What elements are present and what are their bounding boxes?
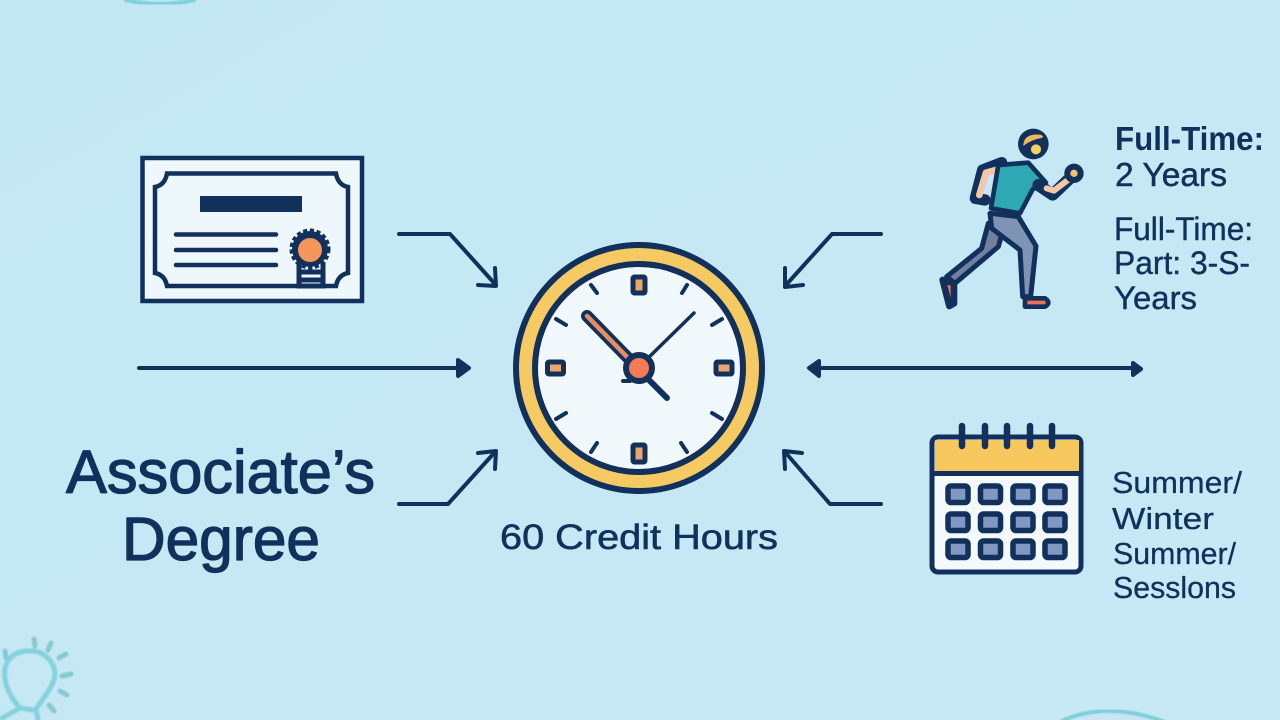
arrow: runner to clock (785, 234, 881, 287)
clock minor ticks (556, 285, 722, 452)
text: part-time duration (1114, 211, 1253, 316)
calendar rings (962, 426, 1052, 446)
seal ribbon (299, 262, 323, 286)
text: part-time duration: Full-Time: (1114, 211, 1253, 247)
icon: clock (516, 245, 762, 491)
text: summer and winter sessions: Summer/ (1113, 536, 1236, 571)
clock hour markers (548, 277, 732, 462)
text: full-time duration (1115, 120, 1264, 193)
seal rosette (292, 231, 328, 267)
title: Associate's Degree: Associate’s (66, 438, 375, 506)
runner legs (947, 213, 1036, 297)
arrow: degree to clock (399, 451, 496, 504)
text: full-time duration: Full-Time: (1115, 120, 1264, 157)
arrow: calendar to clock (784, 451, 881, 504)
icon: running person (943, 129, 1081, 307)
text: part-time duration: Part: 3-S- (1114, 245, 1250, 281)
arrow: double-headed right (809, 361, 1141, 376)
icon: calendar (932, 426, 1081, 572)
calendar header (935, 440, 1079, 472)
text: summer and winter sessions: Winter (1112, 501, 1214, 536)
runner front arm (1038, 167, 1081, 195)
arrow: certificate to clock (399, 234, 496, 286)
runner head (1018, 129, 1049, 159)
text: summer and winter sessions (1112, 465, 1242, 605)
decoration: light bulb (2, 639, 71, 720)
text: summer and winter sessions: Summer/ (1112, 465, 1242, 500)
text: full-time duration: 2 Years (1115, 156, 1227, 193)
icon: diploma certificate (142, 158, 362, 301)
clock hands (587, 313, 694, 398)
runner shoes (943, 280, 1048, 307)
calendar date cells (948, 486, 1065, 558)
runner torso (991, 163, 1046, 213)
arrow: left long to clock (139, 360, 469, 376)
title: Associate's Degree (66, 438, 375, 573)
runner back arm (975, 163, 1002, 200)
text: part-time duration: Years (1114, 280, 1197, 316)
text: summer and winter sessions: Sesslons (1113, 570, 1236, 605)
label: 60 Credit Hours: 60 Credit Hours (500, 518, 778, 557)
decoration: top arc (126, 0, 194, 4)
title: Associate's Degree: Degree (122, 505, 320, 573)
decoration: bottom arc (1060, 711, 1165, 720)
